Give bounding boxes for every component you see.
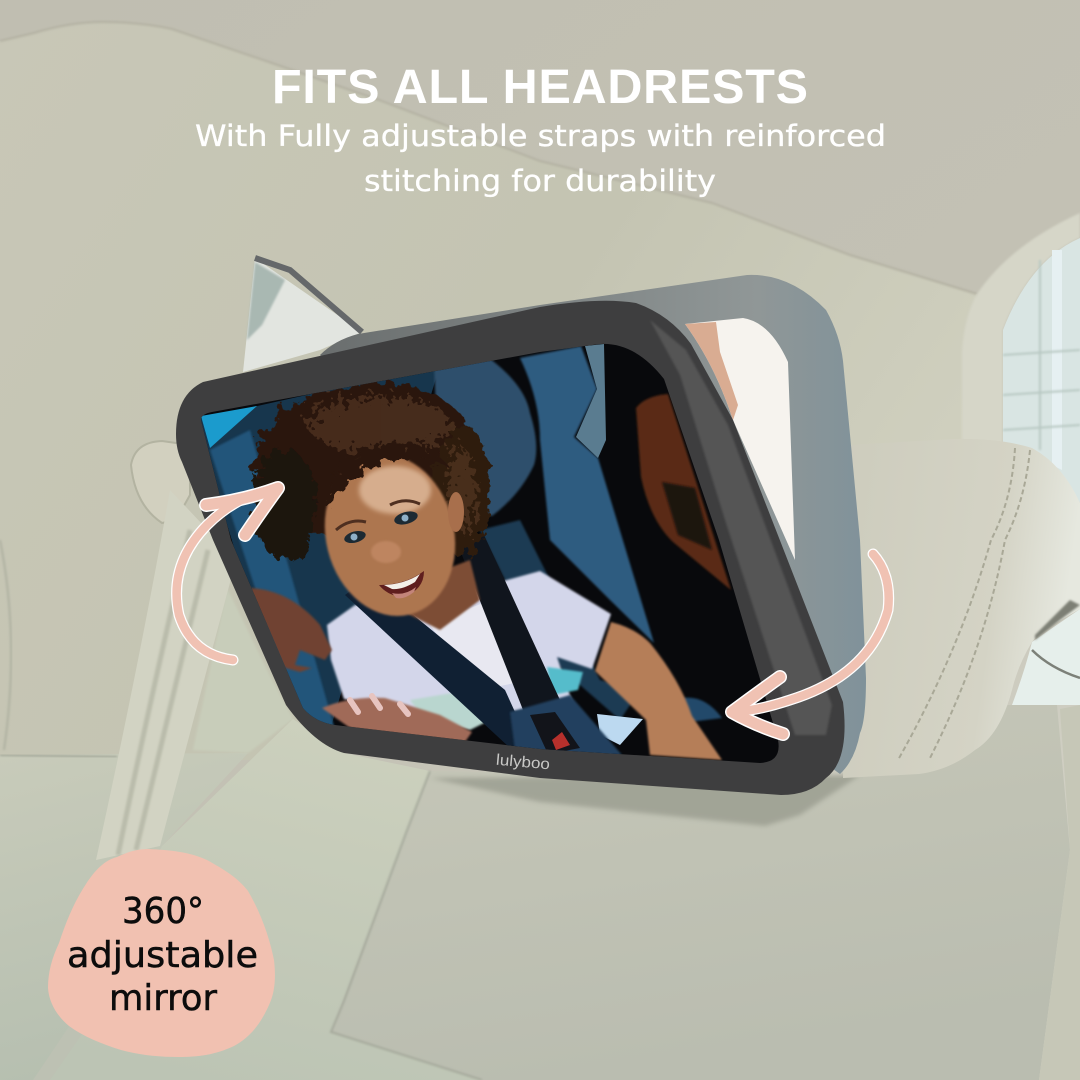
badge: 360 adjustable mirror: mirror: [109, 978, 217, 1019]
right window: [1003, 238, 1080, 705]
mirror reflection scene: [190, 330, 790, 770]
mirror black frame: [176, 301, 845, 795]
rear pillar panel: [0, 22, 977, 760]
shirt: [327, 571, 611, 726]
hair: [245, 371, 490, 561]
reflected background: [190, 330, 790, 770]
left rear window: [243, 258, 362, 372]
window gap under headrest: [1012, 609, 1080, 705]
hair fringe over forehead: [325, 444, 452, 510]
seat belt: [33, 441, 236, 1080]
subtitle: stitching for durability: [364, 164, 716, 198]
badge: 360 adjustable mirror: [48, 849, 275, 1057]
mouth: [379, 571, 424, 597]
car seat headrest: [434, 358, 536, 516]
shoulder piece right of belt: [193, 588, 293, 753]
eyes: [344, 531, 366, 543]
subtitle: With Fully adjustable straps with reinforced: [195, 119, 886, 153]
title: FITS ALL HEADRESTS: [272, 60, 808, 114]
logo: lulyboo: [495, 752, 551, 773]
straps: [345, 592, 516, 746]
badge: 360 adjustable mirror: 360°: [122, 891, 204, 932]
buckle: [510, 695, 622, 760]
frame lighter right side: [650, 320, 832, 735]
headrest: [843, 439, 1080, 778]
main seat back: [331, 705, 1070, 1080]
badge: 360 adjustable mirror: adjustable: [67, 935, 258, 976]
arrow: rotate up-left: [177, 488, 278, 660]
front seat cushion: [45, 719, 482, 1080]
arrow: rotate down-right: [732, 554, 889, 734]
face: [323, 440, 464, 618]
lower hand: [322, 698, 472, 742]
door panel: [636, 394, 731, 590]
right seat edge: [1039, 705, 1080, 1080]
subtitle: [195, 119, 886, 198]
neck: [408, 559, 481, 632]
console cup: [683, 698, 722, 722]
window through strap frame: [685, 318, 795, 560]
adult hand: [250, 588, 332, 672]
mirror grey back shell: [320, 275, 866, 774]
lower left panels: [0, 753, 248, 1080]
arm of child: [595, 622, 722, 760]
mirror: [176, 275, 866, 795]
shorts: [597, 714, 643, 745]
car seat wing: [520, 346, 654, 643]
right window arch: [962, 213, 1080, 445]
mirror shadow on seat: [430, 775, 860, 826]
